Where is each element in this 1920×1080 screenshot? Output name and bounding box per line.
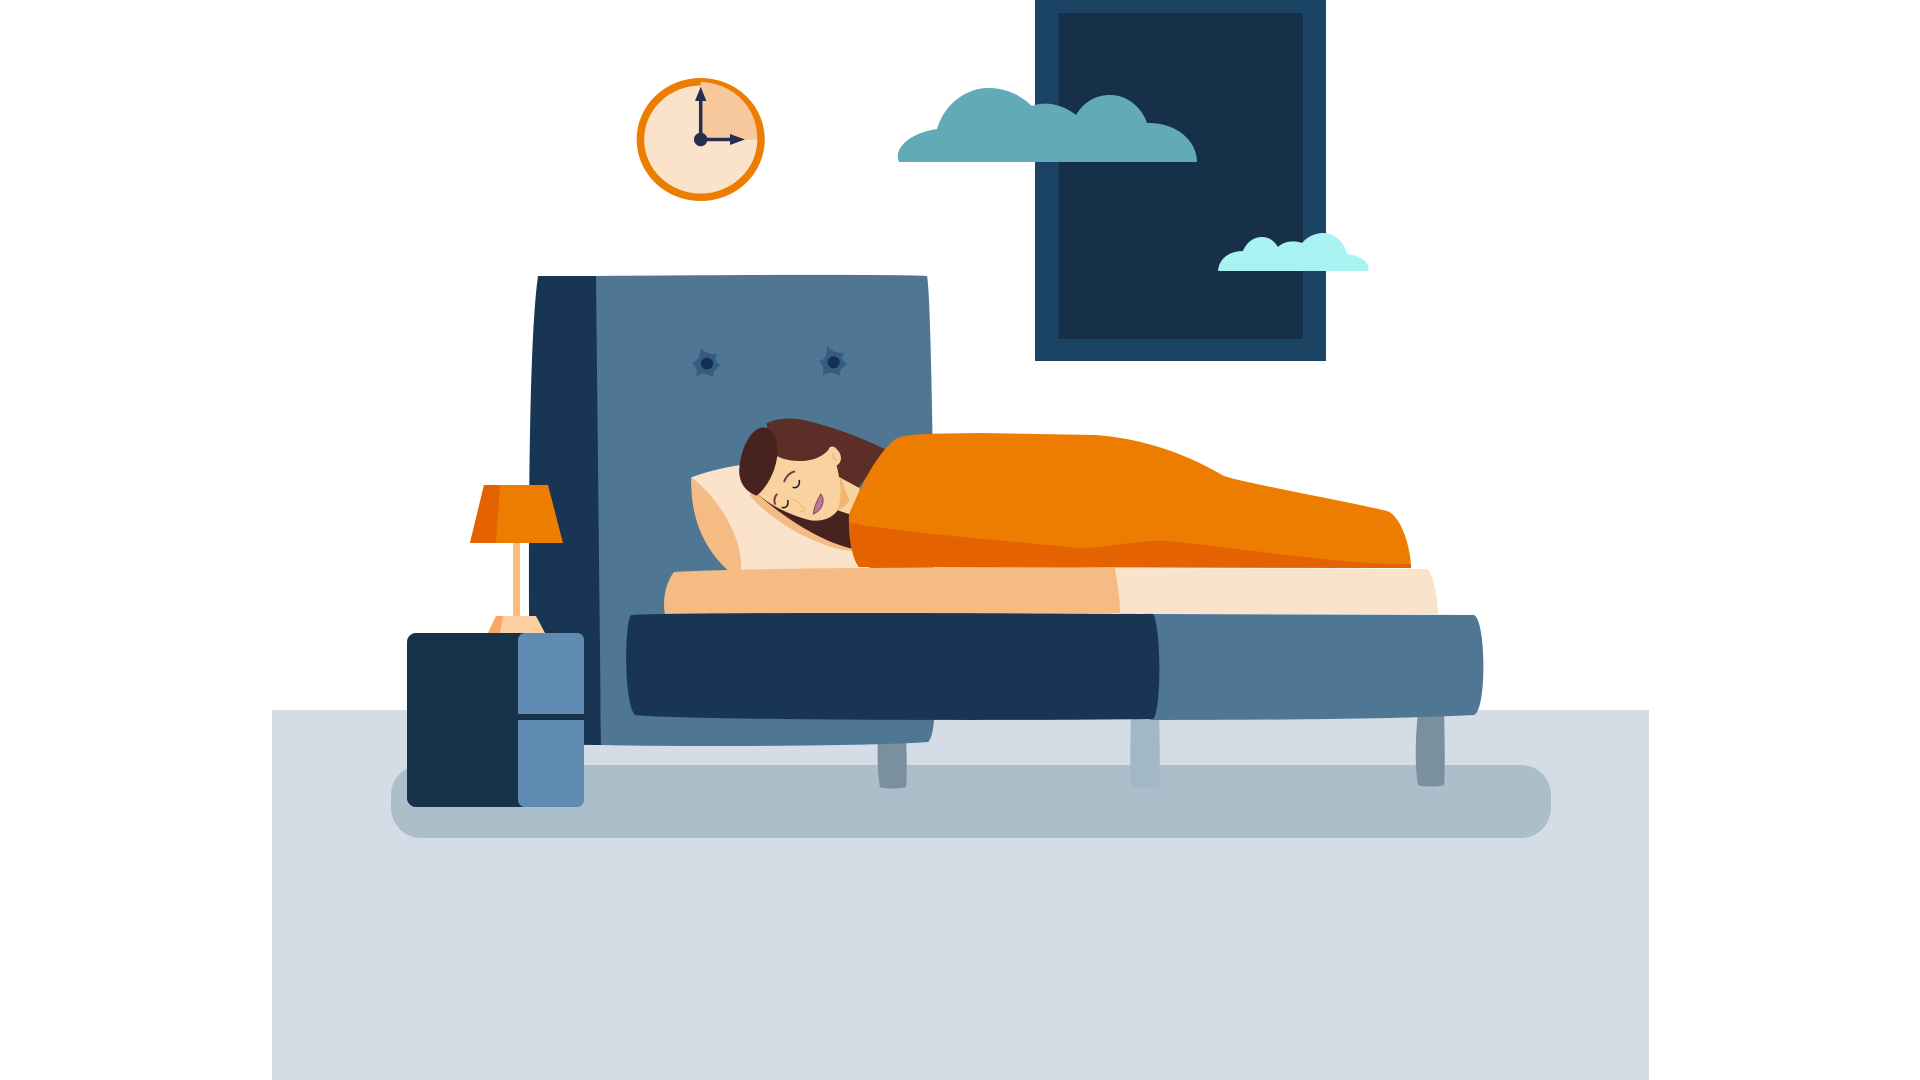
cloud: small xyxy=(1218,233,1368,271)
nightstand xyxy=(407,633,584,807)
bed legs xyxy=(878,712,1445,788)
window xyxy=(1035,0,1326,361)
blanket fold xyxy=(849,522,1411,568)
hair: upper xyxy=(767,419,887,490)
rug xyxy=(391,765,1551,838)
wall clock xyxy=(640,82,761,197)
ear detail xyxy=(833,453,837,461)
bed sheet xyxy=(664,567,1438,614)
mouth xyxy=(813,494,823,514)
face xyxy=(759,447,841,521)
cloud: large xyxy=(898,88,1197,162)
table lamp xyxy=(470,485,563,633)
hair: lower xyxy=(758,495,863,549)
headboard xyxy=(529,275,934,746)
mattress base xyxy=(626,613,1483,720)
hair shadow on pillow xyxy=(749,490,855,552)
hair bun xyxy=(739,427,777,496)
eyebrows and eyes xyxy=(774,471,805,512)
headboard tuft: right xyxy=(818,346,847,376)
blanket xyxy=(849,433,1411,568)
floor xyxy=(272,710,1649,1080)
neck xyxy=(837,477,860,515)
headboard tuft: left xyxy=(692,347,721,377)
pillow xyxy=(691,465,870,571)
sleeping person xyxy=(739,419,887,552)
